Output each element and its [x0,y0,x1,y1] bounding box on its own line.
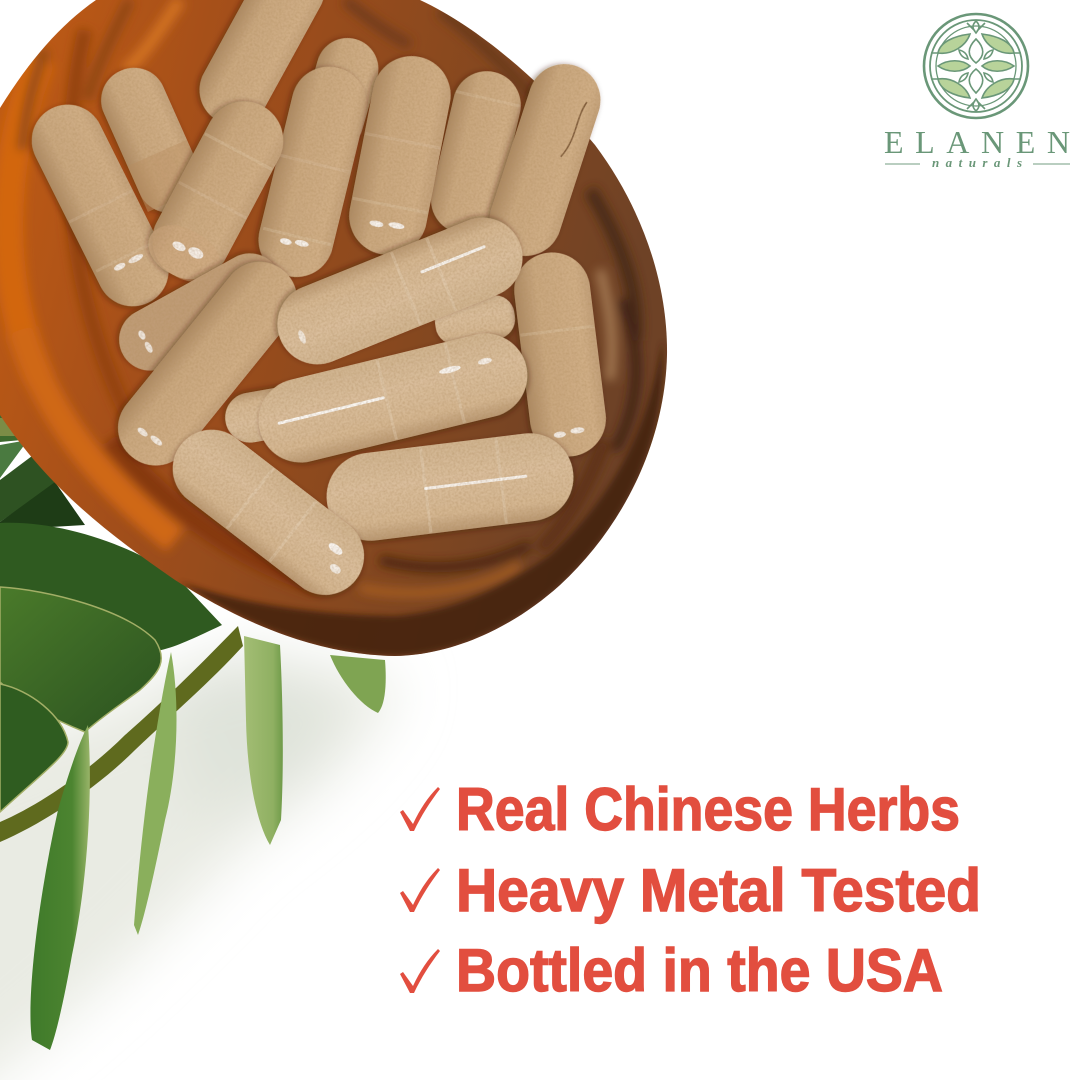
logo: Elanen Naturals [884,14,1070,170]
soft shadow under leaves [0,650,400,1080]
capsule [342,49,457,262]
capsule [424,64,528,241]
narrow leaf far left [30,725,90,1050]
leaves branch [0,410,386,1050]
logo wordmark: ELANEN [884,124,1070,160]
item: Bottled in the USA: Bottled in the USA [456,937,943,1004]
capsule [187,0,337,137]
small leaf right [330,655,386,713]
spoon body [0,0,667,656]
capsule [250,325,536,471]
wooden spoon [0,0,667,656]
capsule [19,92,181,319]
capsule [157,414,380,611]
logo tagline: naturals [932,155,1022,170]
capsule [103,247,312,481]
stem [0,626,243,842]
upper left leaves [0,410,85,530]
spoon rim shading [180,340,663,656]
capsule [108,242,292,382]
logo emblem [924,14,1028,118]
capsule [265,206,535,376]
narrow leaf center left [134,652,177,935]
narrow leaf center [244,636,283,845]
capsule [432,293,518,347]
benefits checklist [400,776,981,1004]
leaf: lower left [0,684,68,812]
capsule [138,88,297,293]
item: Heavy Metal Tested: Heavy Metal Tested [456,857,981,924]
capsule [251,59,374,285]
leaf: large rear [0,523,222,652]
leaf: large middle [0,587,161,732]
wood grain [8,0,636,593]
capsule [221,383,309,447]
item: Real Chinese Herbs: Real Chinese Herbs [456,776,960,843]
capsules pile [19,0,610,611]
capsule [510,248,610,461]
capsule [294,31,386,159]
capsule [322,428,578,546]
capsule [480,55,610,265]
capsule [91,58,212,223]
